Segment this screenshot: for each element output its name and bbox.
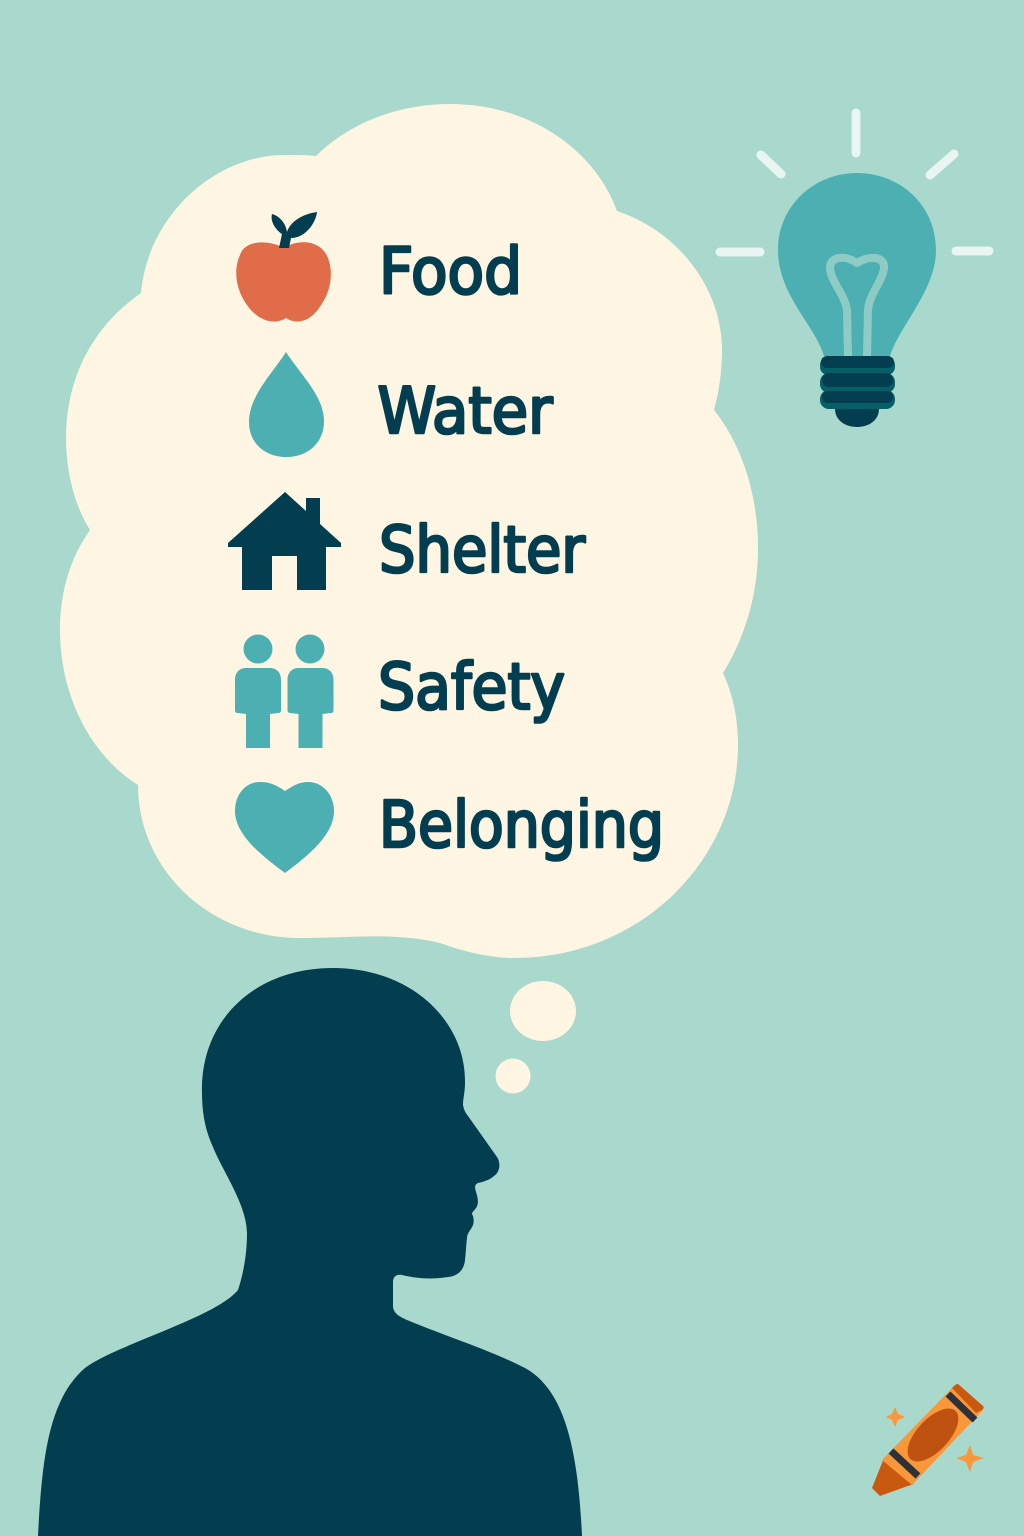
- label: Water: Water: [378, 375, 553, 449]
- icon: water drop: [249, 352, 324, 457]
- person silhouette: [38, 968, 582, 1536]
- icon: apple: [236, 212, 331, 322]
- label: Safety: Safety: [378, 651, 565, 725]
- sparkle: [956, 1445, 984, 1472]
- icon: house: [228, 492, 341, 590]
- sparkle: [886, 1407, 905, 1427]
- icon: crayon: [872, 1384, 984, 1496]
- filament: [830, 258, 884, 356]
- icon: heart: [235, 782, 334, 873]
- screw base: [820, 356, 895, 427]
- icon: light bulb: [720, 113, 989, 427]
- bulb glass: [778, 173, 936, 356]
- crayon cap: [952, 1384, 984, 1413]
- label: Food: Food: [379, 236, 522, 310]
- crayon tip: [872, 1458, 914, 1496]
- thought bubble large: [510, 981, 576, 1041]
- thought cloud: [60, 104, 758, 958]
- thought bubble small: [496, 1058, 530, 1094]
- label: Belonging: Belonging: [379, 789, 664, 863]
- icon: two people: [235, 634, 334, 748]
- crayon body: [882, 1386, 983, 1485]
- light rays: [720, 113, 989, 252]
- label: Shelter: Shelter: [379, 514, 585, 588]
- crayon bands: [891, 1394, 975, 1476]
- crayon label oval: [899, 1400, 967, 1470]
